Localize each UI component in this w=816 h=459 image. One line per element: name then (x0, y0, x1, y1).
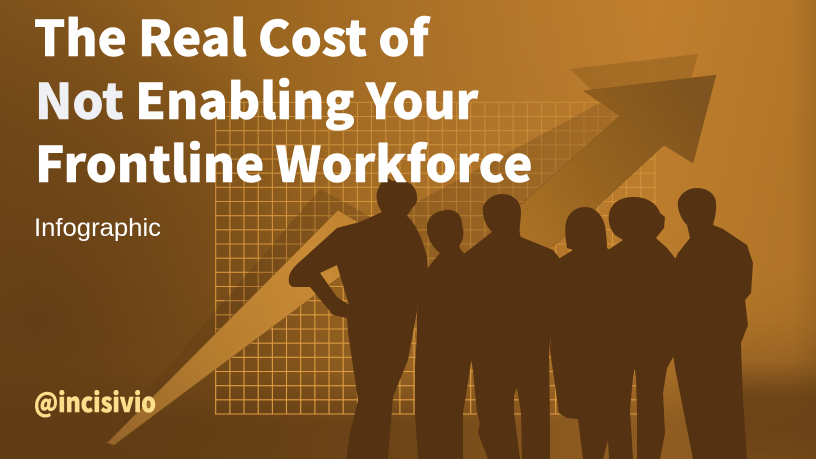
shadow arrow (118, 54, 698, 432)
title: The Real Cost of (34, 0, 431, 71)
person 5 (608, 197, 680, 459)
title: Not Enabling Your (35, 63, 478, 134)
subtitle: Infographic (34, 214, 161, 242)
person 6 (668, 188, 753, 459)
chart grid (215, 102, 656, 414)
person 4 (550, 207, 640, 459)
person 1 (289, 176, 428, 459)
handle: @incisivio (34, 383, 156, 420)
person 2 (415, 210, 480, 459)
silhouettes of six workers (289, 176, 753, 459)
rising arrow (107, 75, 716, 445)
title: Frontline Workforce (35, 126, 533, 197)
person 3 (462, 194, 561, 459)
